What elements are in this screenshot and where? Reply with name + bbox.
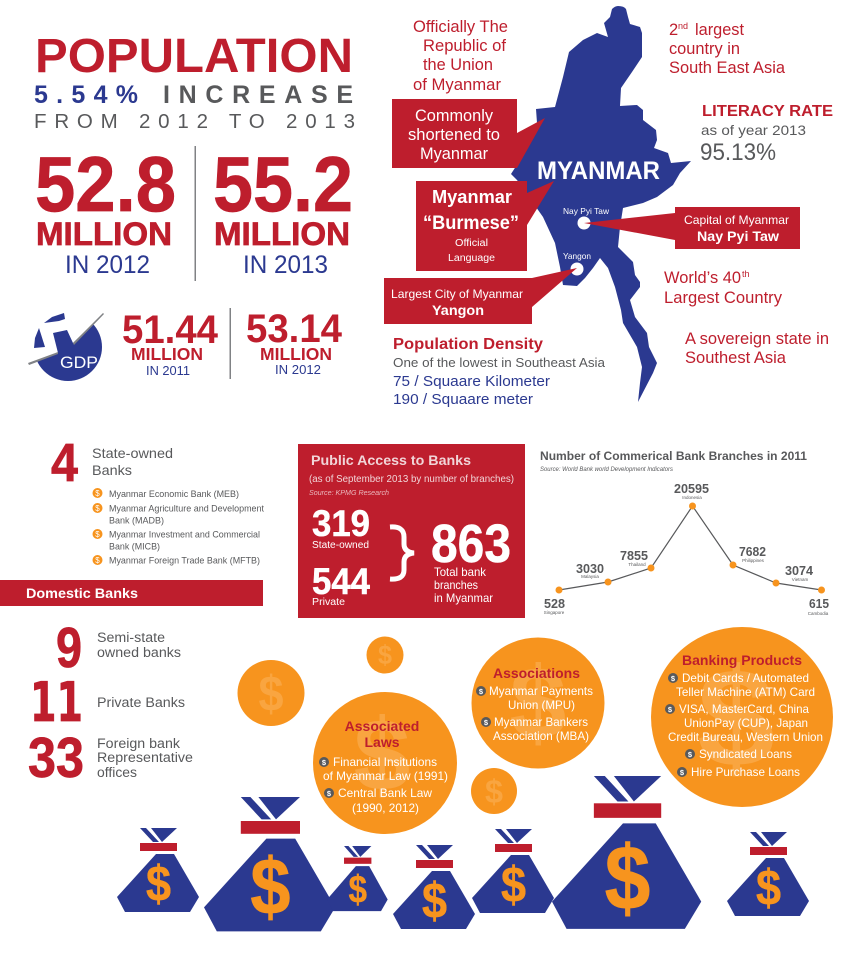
marker: Nay Pyi Taw: [563, 206, 610, 230]
state-owned banks: 4: [51, 433, 78, 493]
bank list: Myanmar Investment and Commercial: [109, 530, 260, 540]
text: second largest: country in: [669, 40, 740, 58]
text: official name: [413, 18, 508, 94]
chart: commercial bank branches: Thailand: [628, 562, 646, 567]
chart: commercial bank branches: Singapore: [544, 610, 565, 615]
callout: official language: Myanmar: [432, 187, 512, 207]
chart: commercial bank branches: Indonesia: [682, 495, 702, 500]
money bag 6: $: [605, 828, 650, 929]
text: literacy rate: LITERACY RATE: [702, 103, 833, 120]
population 2012: 52.8: [35, 140, 176, 228]
foreign bank offices: [28, 726, 193, 790]
circle: associations: [472, 638, 604, 768]
circle: associated laws: $: [327, 789, 332, 798]
circle: associated laws: Associated: [345, 718, 419, 734]
text: second largest: South East Asia: [669, 59, 786, 77]
population 2013: [213, 140, 353, 279]
coin: left: $: [258, 666, 284, 722]
circle: banking products: Teller Machine (ATM) Card: [676, 685, 815, 699]
callout: official language: “Burmese”: [423, 213, 519, 234]
circle: associations: $: [484, 718, 489, 727]
circle: banking products: Syndicated Loans: [699, 747, 792, 761]
chart: commercial bank branches: 615: [809, 596, 829, 611]
bank list: Myanmar Agriculture and Development: [109, 504, 264, 514]
panel: public access to banks: (as of September 2013 by number of branches): [309, 474, 514, 485]
chart: commercial bank branches: 528: [544, 596, 565, 611]
callout: commonly shortened: shortened to: [408, 126, 500, 144]
circle: associations: Association (MBA): [493, 729, 589, 743]
chart: commercial bank branches: Malaysia: [581, 574, 599, 579]
money bag 2: [204, 797, 335, 931]
heading: domestic banks: Domestic Banks: [26, 585, 138, 601]
circle: banking products: $: [668, 705, 673, 714]
callout: commonly shortened: Myanmar: [420, 145, 488, 163]
title: population: FROM 2012 TO 2013: [34, 110, 355, 133]
foreign bank offices: Representative: [97, 750, 193, 765]
title: population: POPULATION: [35, 30, 353, 83]
marker: Yangon: Yangon: [563, 251, 591, 261]
bank list: Bank (MICB): [109, 542, 160, 552]
panel: public access to banks: State-owned: [312, 540, 369, 551]
panel: public access to banks: 863: [431, 514, 511, 574]
callout: capital: Nay Pyi Taw: [697, 228, 779, 244]
text: sovereign state: Southest Asia: [685, 349, 787, 367]
chart: commercial bank branches: Source: World Bank world Development Indicators: [540, 467, 673, 473]
chart: commercial bank branches: [540, 449, 829, 616]
marker: Yangon: [563, 251, 591, 276]
chart: commercial bank branches: Vietnam: [792, 577, 808, 582]
money bag 7: $: [756, 860, 781, 916]
callout: capital: [584, 207, 800, 249]
GDP 2011: [122, 308, 219, 378]
private banks: Private Banks: [97, 695, 185, 710]
marker: Nay Pyi Taw: Nay Pyi Taw: [563, 206, 610, 216]
circle: banking products: Debit Cards / Automated: [682, 671, 809, 685]
text: official name: of Myanmar: [413, 76, 502, 94]
text: sovereign state: A sovereign state in: [685, 330, 829, 348]
chart: commercial bank branches: 7682: [739, 544, 766, 559]
panel: public access to banks: Private: [312, 597, 345, 608]
money bag 5: [472, 829, 554, 913]
text: population density: 190 / Squaare meter: [393, 392, 533, 408]
text: literacy rate: as of year 2013: [701, 122, 806, 138]
map label: MYANMAR: [537, 157, 660, 185]
chart: commercial bank branches: 7855: [620, 548, 648, 563]
callout: official language: Language: [448, 253, 495, 264]
bank list: Myanmar Foreign Trade Bank (MFTB): [109, 556, 260, 566]
brace: [390, 527, 414, 579]
circle: banking products: $: [680, 768, 685, 777]
title: population: 5.54%: [34, 81, 138, 109]
icon: GDP: GDP: [60, 353, 98, 372]
semi-state banks: [56, 616, 181, 680]
foreign bank offices: Foreign bank: [97, 736, 180, 751]
state-owned banks: [51, 433, 264, 566]
semi-state banks: Semi-state: [97, 630, 165, 645]
text: official name: the Union: [423, 56, 493, 74]
GDP 2012: IN 2012: [275, 362, 321, 377]
money bag 3: $: [348, 869, 367, 912]
panel: public access to banks: Public Access to Banks: [311, 453, 471, 468]
circle: associated laws: of Myanmar Law (1991): [323, 769, 448, 783]
panel: public access to banks: Source: KPMG Research: [309, 490, 389, 497]
text: second largest: nd: [678, 21, 688, 31]
text: population density: Population Density: [393, 336, 543, 353]
panel: public access to banks: Total bank: [434, 565, 487, 579]
icon: GDP: [20, 300, 104, 381]
coin: top: [366, 636, 404, 674]
callout: largest city: Yangon: [432, 302, 484, 318]
state-owned banks: State-owned: [92, 445, 173, 461]
coin: small: $: [485, 773, 503, 810]
text: literacy rate: 95.13%: [700, 139, 776, 166]
text: population density: [393, 336, 606, 408]
money bag 7: [727, 832, 809, 916]
text: world rank: World’s 40: [664, 269, 741, 287]
GDP 2012: MILLION: [260, 344, 332, 364]
circle: associations: $: [479, 687, 484, 696]
text: world rank: Largest Country: [664, 289, 783, 307]
circle: banking products: Banking Products: [682, 652, 802, 668]
chart: commercial bank branches: 3074: [785, 563, 814, 578]
bank list: $: [95, 489, 100, 498]
money bag 4: [393, 845, 475, 929]
chart: commercial bank branches: Number of Commerical Bank Branches in 2011: [540, 449, 807, 463]
callout: official language: [416, 181, 554, 271]
circle: banking products: Hire Purchase Loans: [691, 765, 800, 779]
coin: left: [238, 660, 304, 726]
money bag 1: [117, 828, 199, 912]
circle: associations: Associations: [493, 665, 580, 681]
bank list: Bank (MADB): [109, 516, 164, 526]
GDP 2011: 51.44: [122, 308, 219, 352]
money bag 5: $: [501, 857, 526, 913]
circle: associated laws: [313, 692, 457, 834]
circle: associated laws: $: [354, 698, 410, 812]
chart: commercial bank branches: Cambodia: [808, 611, 829, 616]
circle: associated laws: Financial Insitutions: [333, 755, 437, 769]
panel: public access to banks: [298, 444, 525, 618]
population 2012: IN 2012: [65, 251, 150, 279]
semi-state banks: 9: [56, 616, 82, 680]
circle: banking products: $: [697, 639, 775, 796]
circle: banking products: Credit Bureau, Western Union: [668, 730, 823, 744]
population 2013: IN 2013: [243, 251, 328, 279]
text: literacy rate: [700, 103, 833, 166]
circle: banking products: VISA, MasterCard, China: [679, 702, 809, 716]
money bag 6: [552, 776, 701, 929]
state-owned banks: Banks: [92, 462, 132, 478]
coin: small: [471, 768, 517, 814]
panel: public access to banks: 319: [312, 503, 370, 544]
circle: associated laws: Laws: [364, 734, 400, 750]
bank list: $: [95, 556, 100, 565]
GDP 2012: [246, 307, 343, 377]
chart: commercial bank branches: 3030: [576, 561, 604, 576]
circle: banking products: $: [688, 750, 693, 759]
title: population: INCREASE: [163, 81, 353, 109]
semi-state banks: owned banks: [97, 645, 181, 660]
population 2012: [35, 140, 176, 279]
text: official name: Officially The: [413, 18, 508, 36]
GDP 2012: 53.14: [246, 307, 343, 351]
population 2013: MILLION: [214, 216, 350, 252]
callout: official language: Official: [455, 238, 488, 249]
callout: commonly shortened: Commonly: [415, 107, 494, 125]
circle: associated laws: (1990, 2012): [352, 801, 419, 815]
panel: public access to banks: branches: [434, 578, 478, 592]
GDP 2011: MILLION: [131, 344, 203, 364]
money bag 2: $: [250, 842, 290, 931]
text: second largest: [669, 21, 786, 77]
text: second largest: 2: [669, 21, 678, 39]
GDP 2011: IN 2011: [146, 363, 190, 378]
money bag 3: [327, 846, 388, 912]
circle: associated laws: $: [322, 758, 327, 767]
population 2012: MILLION: [36, 216, 172, 252]
text: world rank: th: [742, 269, 750, 279]
circle: associations: Myanmar Bankers: [494, 715, 588, 729]
circle: associations: $: [510, 646, 566, 760]
private banks: [30, 671, 185, 734]
text: sovereign state: [685, 330, 829, 367]
title: population: [34, 30, 355, 133]
private banks: 11: [30, 671, 83, 734]
chart: commercial bank branches: Philippines: [742, 558, 765, 563]
money bag 1: $: [146, 856, 171, 912]
money bag 4: $: [422, 873, 447, 929]
population 2013: 55.2: [213, 140, 353, 228]
text: population density: 75 / Squaare Kilometer: [393, 374, 550, 390]
circle: associations: Union (MPU): [508, 698, 575, 712]
callout: largest city: Largest City of Myanmar: [391, 287, 523, 301]
text: world rank: [664, 269, 783, 307]
panel: public access to banks: in Myanmar: [434, 591, 493, 605]
circle: associated laws: Central Bank Law: [338, 786, 432, 800]
bank list: $: [95, 530, 100, 539]
circle: associations: Myanmar Payments: [489, 684, 593, 698]
text: population density: One of the lowest in Southeast Asia: [393, 355, 606, 370]
chart: commercial bank branches: 20595: [674, 481, 709, 496]
bank list: [92, 488, 264, 566]
circle: banking products: $: [671, 674, 676, 683]
coin: top: $: [378, 640, 392, 670]
foreign bank offices: offices: [97, 765, 137, 780]
bank list: $: [95, 504, 100, 513]
bank list: Myanmar Economic Bank (MEB): [109, 489, 239, 500]
circle: banking products: UnionPay (CUP), Japan: [684, 716, 808, 730]
callout: largest city: [384, 268, 577, 324]
text: official name: Republic of: [423, 37, 506, 55]
panel: public access to banks: 544: [312, 561, 370, 602]
circle: banking products: [651, 627, 833, 807]
text: second largest: largest: [695, 21, 744, 39]
map of Myanmar: [511, 6, 691, 402]
callout: commonly shortened: [392, 99, 545, 168]
heading: domestic banks: [0, 580, 263, 606]
callout: capital: Capital of Myanmar: [684, 213, 789, 227]
foreign bank offices: 33: [28, 726, 84, 790]
